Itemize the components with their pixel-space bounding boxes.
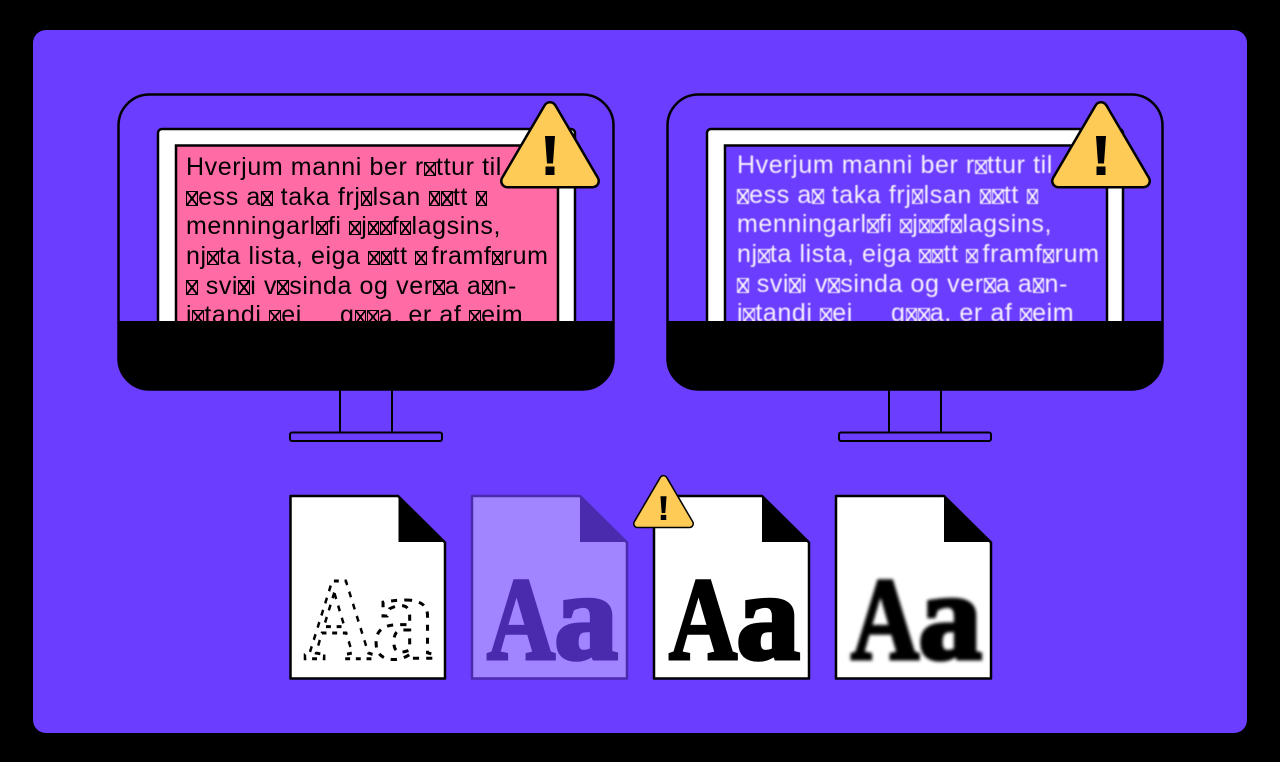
- dashed Aa: a: [372, 549, 435, 686]
- screen text: svi i v sinda og ver a a n-: [206, 272, 517, 300]
- faded Aa: A: [487, 555, 555, 685]
- page: [654, 496, 809, 678]
- screen text, blurred: nj ta lista, eiga tt framf rum: [737, 240, 1100, 268]
- monitor stand: [290, 390, 442, 441]
- dashed Aa: [304, 549, 435, 686]
- file: corrupted font with warning: [638, 479, 809, 686]
- screen text, blurred: menningarl fi j f lagsins,: [737, 210, 1052, 238]
- monitor: right, blurred text screen: [667, 94, 1163, 441]
- blurred Aa: [851, 549, 982, 686]
- page fold: [944, 496, 991, 542]
- icon: small warning triangle: [638, 479, 689, 524]
- icon: warning triangle: [508, 108, 592, 181]
- faded Aa: [487, 549, 618, 686]
- page fold: [580, 496, 627, 542]
- page: [290, 496, 445, 678]
- file: blurred font: [836, 496, 991, 686]
- blurred Aa: A: [851, 555, 919, 685]
- page fold: [762, 496, 809, 542]
- faded Aa: a: [554, 549, 618, 686]
- screen text: ess a taka frj lsan tt: [198, 183, 468, 211]
- icon: warning triangle: [1058, 108, 1144, 181]
- monitor: left, pink screen: [118, 94, 614, 441]
- solid Aa: a: [736, 549, 800, 686]
- blurred Aa: a: [918, 549, 982, 686]
- screen text, blurred: ess a taka frj lsan tt: [749, 181, 1019, 209]
- screen text: nj ta lista, eiga tt framf rum: [186, 242, 549, 270]
- screen text: Hverjum manni ber r ttur til: [186, 153, 502, 181]
- monitor stand: [839, 390, 991, 441]
- monitor white frame: [707, 129, 1123, 344]
- dashed Aa: A: [304, 555, 374, 685]
- monitor outline: [118, 94, 614, 390]
- screen text, blurred: svi i v sinda og ver a a n-: [757, 270, 1068, 298]
- screen text, blurred: [735, 151, 1103, 321]
- monitor outline: [668, 94, 1162, 390]
- page: [836, 496, 991, 678]
- pink screen: [176, 146, 558, 336]
- page: [472, 496, 627, 678]
- screen text: menningarl fi j f lagsins,: [186, 212, 501, 240]
- monitor chin: [667, 321, 1163, 390]
- page fold: [398, 496, 446, 542]
- file: dashed outline font: [290, 496, 446, 686]
- screen text, blurred: Hverjum manni ber r ttur til: [737, 151, 1053, 179]
- file: faded font: [472, 496, 627, 686]
- screen text: [186, 153, 554, 321]
- monitor chin: [118, 321, 614, 390]
- purple screen: [725, 146, 1107, 336]
- monitor white frame: [158, 129, 575, 344]
- solid Aa: [669, 549, 800, 686]
- solid Aa: A: [669, 555, 737, 685]
